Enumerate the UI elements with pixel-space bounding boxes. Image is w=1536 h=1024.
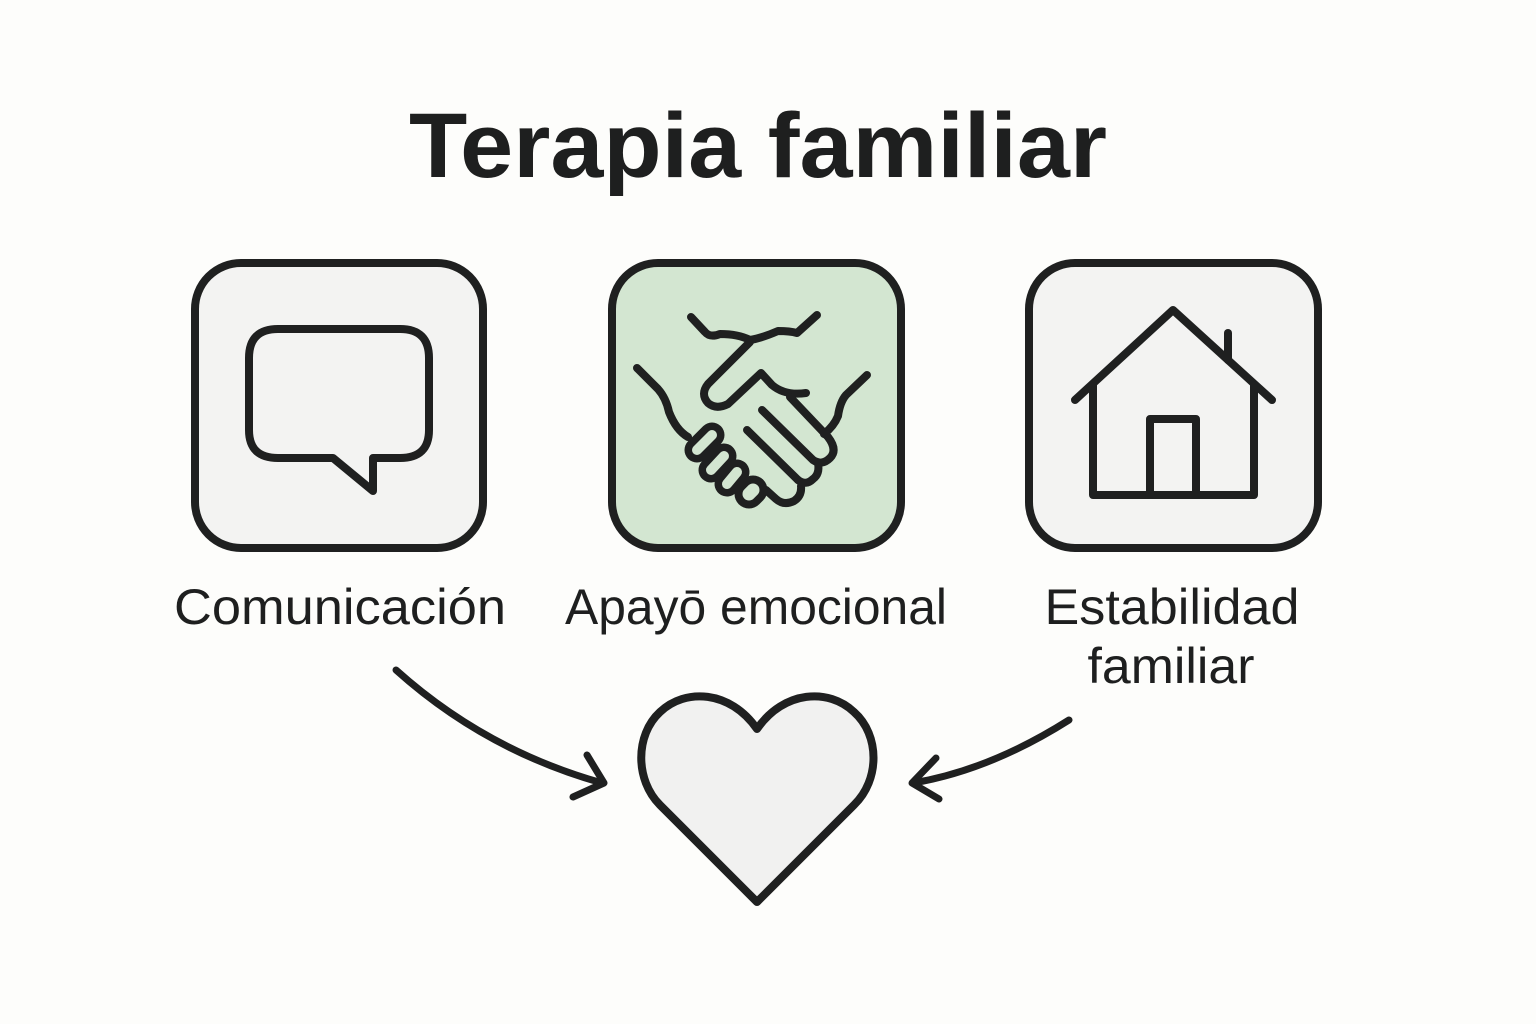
label: comunicación: Comunicación <box>174 579 506 635</box>
icon: house <box>1075 310 1272 495</box>
icon: speech bubble <box>249 329 429 491</box>
panel: apoyo emocional <box>612 263 901 548</box>
panel background <box>1029 263 1318 548</box>
arrow: left to heart <box>396 670 604 797</box>
label: estabilidad familiar: familiar <box>1088 638 1254 694</box>
panel: estabilidad familiar <box>1029 263 1318 548</box>
arrow: right to heart <box>912 720 1069 799</box>
label: estabilidad familiar: Estabilidad <box>1044 579 1300 635</box>
icon: heart <box>641 696 874 902</box>
panel background <box>612 263 901 548</box>
left hand knuckles <box>697 435 737 484</box>
panel: comunicación <box>195 263 483 548</box>
icon: handshake <box>637 315 867 503</box>
title: Terapia familiar <box>409 95 1107 197</box>
panel background <box>195 263 483 548</box>
label: apoyo emocional: Apayō emocional <box>565 579 947 635</box>
